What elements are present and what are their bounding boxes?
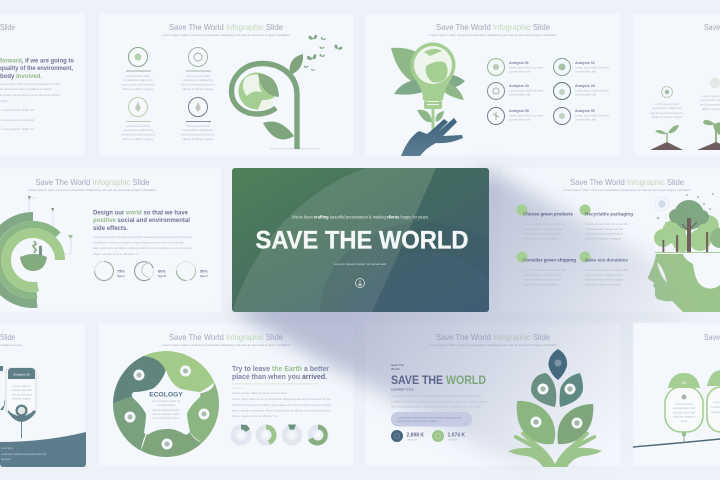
analysis items: Analysis 03 xyxy=(509,84,529,88)
icon grid with captions: labore et dolore magna xyxy=(183,137,214,141)
body text xyxy=(0,82,61,131)
body text: duis aute irure dolor in xyxy=(232,414,279,418)
panel: head and trees slide xyxy=(563,179,720,312)
title fragment: Slide xyxy=(0,22,15,32)
content: save the world text block: Save The xyxy=(391,363,405,367)
analysis items: Lorem ipsum dolor sit amet xyxy=(575,88,609,92)
body text xyxy=(93,235,193,256)
pin card 01: dolore magna xyxy=(673,414,696,418)
content: save the world text block xyxy=(391,363,488,442)
analysis items: Analysis 01 xyxy=(509,61,529,65)
subtitle: Lorem ipsum dolor sit amet consectetur adipiscing elit sed do eiusmod tempor incididunt xyxy=(162,343,290,347)
icon grid with captions: Lorem ipsum dolor xyxy=(186,74,210,78)
body text: et dolore magna aliqua ut enim ad minim veniam xyxy=(0,93,61,97)
caption: Lorem ipsum dolor sit amet elit xyxy=(334,262,386,266)
panel: bottom-left pin slide fragment xyxy=(0,323,86,467)
analysis items: consectetur elit xyxy=(509,92,530,96)
chart: ecology cycle: ut enim ad minim veniam xyxy=(152,416,180,420)
icon grid with captions: consectetur adipiscing xyxy=(183,128,214,132)
panel: top-left slide fragment xyxy=(0,13,86,156)
panel: light bulb slide xyxy=(365,13,621,156)
pin card 01 xyxy=(665,373,703,443)
content: feature list on head slide: Lorem ipsum dolor sit amet elit xyxy=(523,222,565,226)
analysis items: Analysis 02 xyxy=(575,61,595,65)
heading: Design our world so that we have xyxy=(93,209,188,216)
seedling column: consectetur adipiscing xyxy=(652,106,683,110)
seedling column: dolore magna xyxy=(702,107,720,111)
illustration: head with trees xyxy=(648,193,720,312)
stat: 1.074 K: Analysis xyxy=(448,438,459,442)
pin card 01: 01 xyxy=(682,380,687,385)
body text: Lorem ipsum dolor sit amet consectetur adipiscing elit sed do eiusmod tempor xyxy=(93,235,192,239)
heading: positive social and environmental xyxy=(93,217,190,224)
seedling column: consectetur elit xyxy=(700,98,720,102)
content: feature list on head slide: labore et dolore magna xyxy=(585,236,622,240)
body text xyxy=(232,382,332,418)
content: feature list on head slide: Choose green products xyxy=(523,212,573,218)
heading: going forward: forward, if we are going to xyxy=(0,58,74,64)
panel: concentric donut slide xyxy=(0,179,208,308)
body text: incididunt ut labore et dolore magna aliqua ut enim ad minim veniam nostrud xyxy=(232,403,332,407)
center label: ECOLOGY xyxy=(149,392,183,398)
content: feature list on head slide: sed do eiusmod tempor xyxy=(523,278,561,282)
pin card: analysis: sed do eiusmod xyxy=(12,392,32,396)
stat: 2.898 K: 2.898 K xyxy=(406,432,424,438)
seedling column: labore et dolore magna xyxy=(652,115,683,119)
callout pill: sed do eiusmod tempor incididunt xyxy=(397,419,439,423)
analysis items: consectetur elit xyxy=(575,118,596,122)
chart: ecology cycle xyxy=(113,351,219,457)
body text: Lorem ipsum dolor sit xyxy=(1,118,34,122)
heading: place than when you arrived. xyxy=(232,372,327,381)
icon grid with captions: labore et dolore magna xyxy=(183,87,214,91)
pin card 01: elit xyxy=(681,419,687,423)
chart: ecology cycle: sed do eiusmod tempor xyxy=(152,408,180,412)
content: feature list on head slide: sed do eiusmod tempor xyxy=(585,278,623,282)
content: feature list on head slide xyxy=(516,204,633,286)
timeline line xyxy=(633,439,720,447)
pin card 02: sed do xyxy=(711,410,720,414)
title: Save The World Infographic Slide xyxy=(436,332,550,342)
content: feature list on head slide: consectetur adipiscing xyxy=(585,273,624,277)
progress rings: 80% xyxy=(158,270,166,274)
heading xyxy=(93,209,190,232)
analysis items: Lorem ipsum dolor sit amet xyxy=(575,66,609,70)
body text: quis nostrud exercitation ullamco laboris nisi ut aliquip ex ea commodo duis xyxy=(232,408,332,412)
content: feature list on head slide: sed do eiusmod tempor xyxy=(523,232,561,236)
analysis items: Analysis 05 xyxy=(509,109,529,113)
pin card 01: consectetur elit xyxy=(673,406,695,410)
bottom wave band xyxy=(0,432,86,467)
content: save the world text block: incididunt ut labore et dolore magna aliqua ut enim ad minim veniam nostrud xyxy=(391,400,488,404)
long cast shadow of hero xyxy=(232,170,690,470)
analysis items: consectetur elit xyxy=(575,70,596,74)
pin card 02: consect xyxy=(711,405,720,409)
pin card: analysis xyxy=(0,366,36,438)
title: Save The World Infographic Slide xyxy=(436,22,550,32)
content: feature list on head slide: Make eco donations xyxy=(585,258,628,264)
title: Save The World Infographic Slide xyxy=(36,177,150,187)
analysis items: consectetur elit xyxy=(509,70,530,74)
seedling column: sed do eiusmod tempor in xyxy=(650,111,685,115)
callout pill xyxy=(391,412,472,426)
heading: side effects. xyxy=(93,225,128,232)
panel: ecology cycle slide xyxy=(98,323,354,466)
analysis items: consectetur elit xyxy=(575,92,596,96)
heading xyxy=(232,364,329,381)
analysis items: Lorem ipsum dolor sit amet xyxy=(575,114,609,118)
heading: Try to leave the Earth a better xyxy=(232,364,329,373)
body text: duis aute irure dolor in xyxy=(93,252,140,256)
pin card: analysis: consectetur elit xyxy=(12,388,32,392)
donut charts xyxy=(230,424,328,446)
body text: do eiusmod tempor incididunt ut labore xyxy=(0,87,53,91)
content: feature list on head slide: consectetur adipiscing xyxy=(523,273,562,277)
content: save the world text block: SAVE THE WORLD xyxy=(391,375,486,387)
pin card 02 xyxy=(707,370,720,432)
pin card: analysis: Lorem ipsum xyxy=(12,384,31,388)
seedling column: Lorem ipsum dolor xyxy=(655,102,679,106)
illustration: plant stem curling around globe xyxy=(232,34,343,149)
pin card 01: Lorem ipsum xyxy=(675,402,694,406)
panel: hero slide xyxy=(232,168,489,312)
panel: bottom-right pin slide fragment xyxy=(633,323,720,466)
seedling column: sed do eiusmod xyxy=(700,102,720,106)
stat: 2.898 K xyxy=(391,430,424,442)
pin card: analysis: Analysis 05 xyxy=(13,372,30,376)
content: feature list on head slide: Lorem ipsum dolor sit amet elit xyxy=(585,222,628,226)
bottom wave band: consectetur adipiscing elit sed do eiusmod xyxy=(1,452,46,456)
body text: incididunt ut labore et dolore magna aliqua ut enim ad minim veniam xyxy=(93,240,185,244)
stat: 1.074 K xyxy=(432,430,465,442)
cycle icons xyxy=(124,366,210,450)
body text: Lorem ipsum dolor sit amet consectetur adipiscing elit sed do eiusmod tempor xyxy=(232,397,331,401)
bottom wave band: Lorem ipsum xyxy=(1,446,14,450)
chart: ecology cycle: labore et dolore magna xyxy=(152,412,180,416)
icon grid with captions: labore et dolore magna xyxy=(123,137,154,141)
progress rings xyxy=(94,262,208,281)
panel: top-left slide fragment: quality of the environment, xyxy=(0,65,73,72)
main title: SAVE THE WORLD xyxy=(256,226,468,254)
icon grid with captions: consectetur adipiscing xyxy=(183,78,214,82)
content: save the world text block: Lorem ipsum dolor sit amet consectetur adipiscing elit sed do eiusmod tempor xyxy=(391,394,481,398)
tagline: We've been crafting beautiful presentation & making clients happy for years. xyxy=(292,214,429,220)
progress rings: Type A xyxy=(117,275,125,278)
content: feature list on head slide: sed do eiusmod tempor xyxy=(585,232,623,236)
title: Save The World Infographic Slide xyxy=(169,332,283,342)
icon grid with captions: sed do eiusmod tempor in xyxy=(121,132,156,136)
content: feature list on head slide: labore et dolore magna xyxy=(523,236,560,240)
content: feature list on head slide: consectetur adipiscing xyxy=(523,227,562,231)
subtitle: Lorem ipsum dolor sit amet consectetur adipiscing elit sed do eiusmod tempor incididunt xyxy=(162,33,290,37)
body text: Lorem ipsum dolor sit xyxy=(1,108,34,112)
icon grid with captions: labore et dolore magna xyxy=(123,87,154,91)
content: feature list on head slide: consectetur adipiscing xyxy=(585,227,624,231)
body text: quis nostrud exercitation ullamco laboris nisi ut aliquip ex ea commodo xyxy=(93,246,193,250)
progress rings: Type C xyxy=(200,275,208,278)
icon grid with captions: sed do eiusmod tempor in xyxy=(181,82,216,86)
analysis items: Lorem ipsum dolor sit amet xyxy=(509,88,543,92)
title: Save The World Infographic Slide xyxy=(169,22,283,32)
seedling column xyxy=(650,78,720,150)
panel: seedling slide fragment xyxy=(633,13,720,156)
illustration: leaf plant held by hands xyxy=(508,349,602,467)
chart: ecology cycle: Lorem ipsum dolor sit xyxy=(152,399,180,403)
icon grid with captions: Lorem ipsum dolor xyxy=(186,124,210,128)
illustration: bulb, leaves and hand xyxy=(391,42,465,156)
title fragment: Slide xyxy=(0,332,15,342)
subtitle: Lorem ipsum dolor sit amet consectetur adipiscing elit sed do eiusmod tempor incididunt xyxy=(28,188,156,192)
body text: Lorem ipsum dolor sit amet consectetur adipiscing elit xyxy=(232,382,318,386)
bottom wave band: tempor xyxy=(1,457,11,461)
subtitle: Lorem ipsum dolor sit amet consectetur adipiscing elit sed do eiusmod tempor incididunt xyxy=(563,188,691,192)
stat: 2.898 K: Analysis xyxy=(407,438,418,442)
progress rings: Type B xyxy=(158,275,166,278)
content: feature list on head slide: Recyclable packaging xyxy=(585,212,633,218)
content: feature list on head slide: Lorem ipsum dolor sit amet elit xyxy=(585,268,628,272)
chart: concentric arcs with pins xyxy=(0,196,73,303)
analysis items: consectetur elit xyxy=(509,118,530,122)
analysis items: Lorem ipsum dolor sit amet xyxy=(509,66,543,70)
content: save the world text block: World xyxy=(391,367,400,371)
body text: Lorem ipsum dolor sit amet consectetur elit sed xyxy=(0,82,61,86)
icon grid with captions: Lorem ipsum dolor xyxy=(126,124,150,128)
subtitle: Lorem ipsum dolor sit amet consectetur adipiscing elit sed do eiusmod tempor incididunt xyxy=(429,343,557,347)
panel: leaves and hands slide xyxy=(365,323,621,466)
pin card: analysis: dolore magna xyxy=(12,396,31,400)
analysis items: Lorem ipsum dolor sit amet xyxy=(509,114,543,118)
stat: 1.074 K: 1.074 K xyxy=(448,432,465,438)
content: save the world text block: quis nostrud exercitation ullamco laboris nisi ut aliquip ex ea commodo xyxy=(391,404,482,408)
icon: down arrow in circle xyxy=(356,278,364,288)
icon grid with captions: consectetur adipiscing xyxy=(123,128,154,132)
body text: nostrud xyxy=(0,99,7,103)
body text: Lorem ipsum dolor sit amet consectetur xyxy=(232,391,287,395)
body text: tempor xyxy=(232,386,242,390)
title: Save The World Infographic Slide xyxy=(570,177,684,187)
body text: Lorem ipsum dolor sit xyxy=(1,127,34,131)
content: feature list on head slide: Lorem ipsum dolor sit amet elit xyxy=(523,268,565,272)
hero overlay shapes xyxy=(232,168,489,312)
content: feature list on head slide: labore et dolore magna xyxy=(585,282,622,286)
panel: top-left slide fragment: body involved. xyxy=(0,73,42,80)
panel: bottom-left pin slide fragment: incididunt tempor xyxy=(0,343,22,347)
content: feature list on head slide: Consider green shipping xyxy=(523,258,576,264)
pin card 01: sed do eiusmod xyxy=(673,410,696,414)
progress rings: 75% xyxy=(117,270,125,274)
panel: plant and globe slide xyxy=(98,13,354,156)
content: feature list on head slide: labore et dolore magna xyxy=(523,282,560,286)
subtitle: Lorem ipsum dolor sit amet consectetur adipiscing elit sed do eiusmod tempor incididunt xyxy=(429,33,557,37)
seedling column: Lorem ipsum xyxy=(702,94,720,98)
analysis items: Analysis 04 xyxy=(575,84,595,88)
icon grid with captions: sed do eiusmod tempor in xyxy=(121,82,156,86)
analysis items: Analysis 06 xyxy=(575,109,595,113)
content: save the world text block: CONTENT TITLE xyxy=(391,388,414,392)
icon grid with captions xyxy=(121,48,216,141)
icon grid with captions: sed do eiusmod tempor in xyxy=(181,132,216,136)
analysis items xyxy=(488,58,609,124)
icon grid with captions: Lorem ipsum dolor xyxy=(126,74,150,78)
chart: ecology cycle: consectetur xyxy=(157,403,175,407)
progress rings: 50% xyxy=(200,270,208,274)
callout pill: Lorem ipsum dolor sit amet consectetur adipiscing elit xyxy=(397,416,461,420)
icon grid with captions: consectetur adipiscing xyxy=(123,78,154,82)
butterflies xyxy=(304,34,343,71)
